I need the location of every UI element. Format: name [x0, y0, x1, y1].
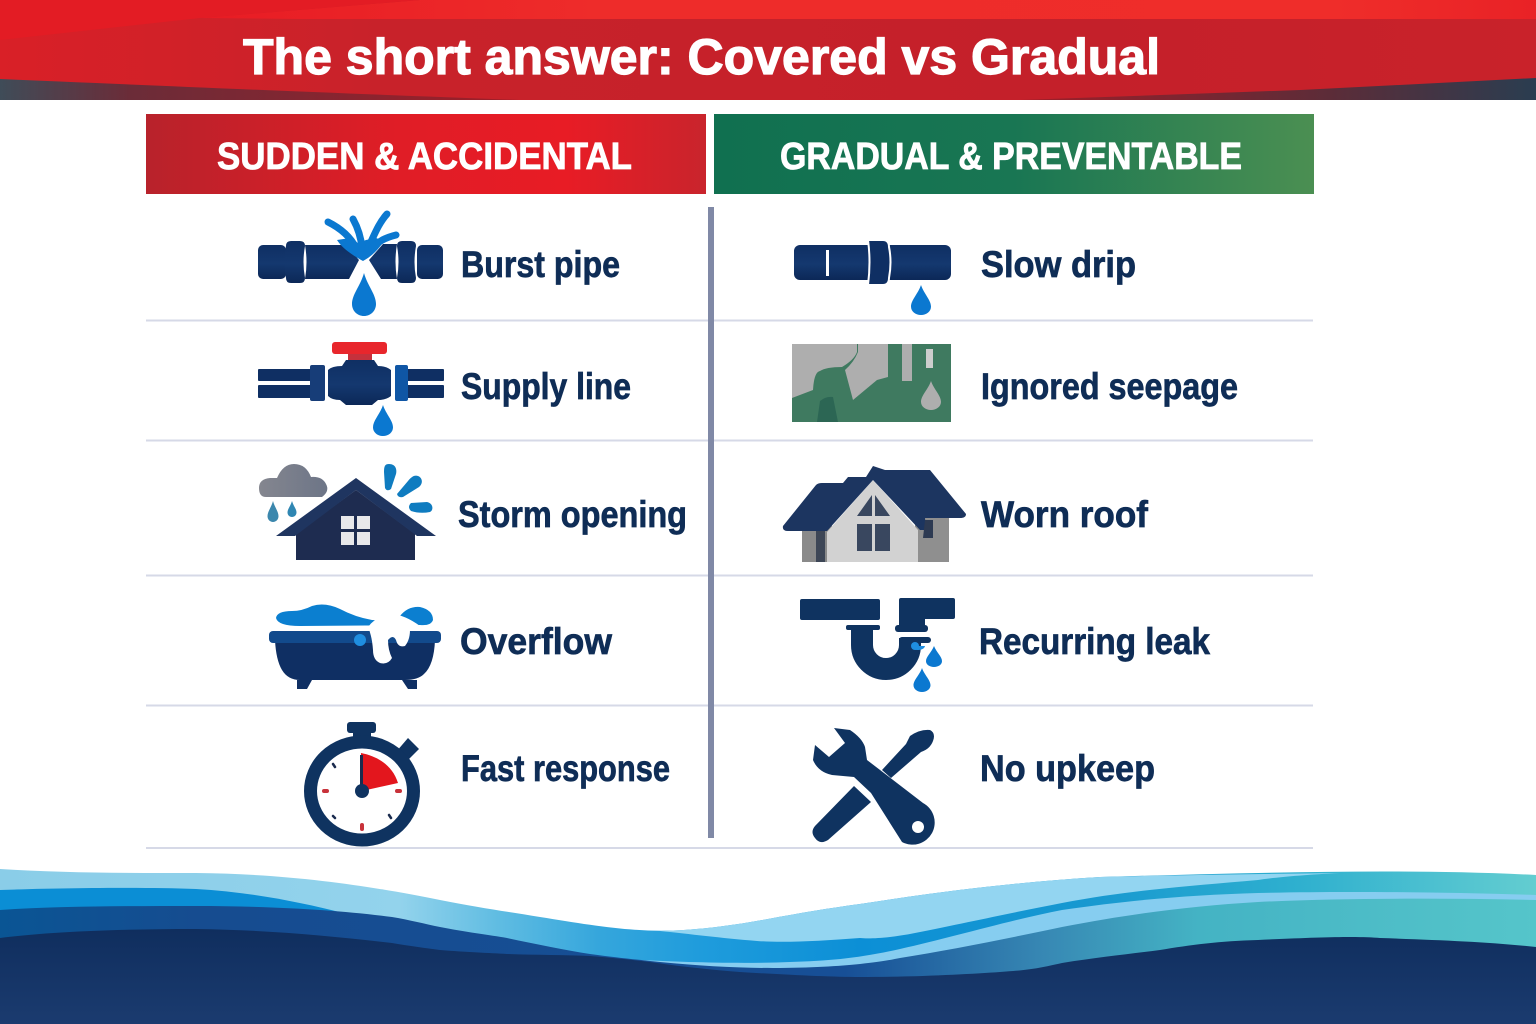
footer water waves — [0, 869, 1536, 1024]
icon: recurring leak trap — [800, 598, 955, 692]
header banner — [0, 0, 1536, 100]
icon: stopwatch — [310, 722, 419, 840]
column header: sudden and accidental: SUDDEN & ACCIDENTAL — [217, 136, 632, 178]
icon: ignored seepage — [792, 344, 951, 422]
label: worn roof: Worn roof — [981, 494, 1149, 535]
label: recurring leak: Recurring leak — [979, 621, 1210, 662]
label: slow drip: Slow drip — [981, 244, 1136, 285]
column header: sudden and accidental — [146, 114, 706, 194]
column header: gradual and preventable: GRADUAL & PREVENTABLE — [780, 136, 1242, 178]
label: supply line: Supply line — [461, 366, 631, 407]
column header: gradual and preventable — [714, 114, 1314, 194]
icon: wrench and screwdriver — [812, 728, 935, 845]
icon: storm opening house — [259, 464, 436, 560]
label: no upkeep: No upkeep — [980, 748, 1155, 789]
label: fast response: Fast response — [461, 748, 670, 789]
panel: sudden and accidental rows — [258, 214, 687, 840]
label: overflow: Overflow — [460, 621, 612, 662]
panel: gradual and preventable rows — [783, 240, 1238, 845]
label: storm opening: Storm opening — [458, 494, 687, 535]
title: The short answer: Covered vs Gradual — [243, 29, 1160, 85]
label: ignored seepage: Ignored seepage — [981, 366, 1238, 407]
icon: burst pipe — [258, 214, 443, 316]
label: burst pipe: Burst pipe — [461, 244, 620, 285]
icon: slow drip pipe — [794, 240, 951, 315]
icon: overflowing bathtub — [269, 605, 441, 689]
icon: worn roof house — [783, 466, 966, 562]
icon: supply line valve — [258, 342, 444, 436]
